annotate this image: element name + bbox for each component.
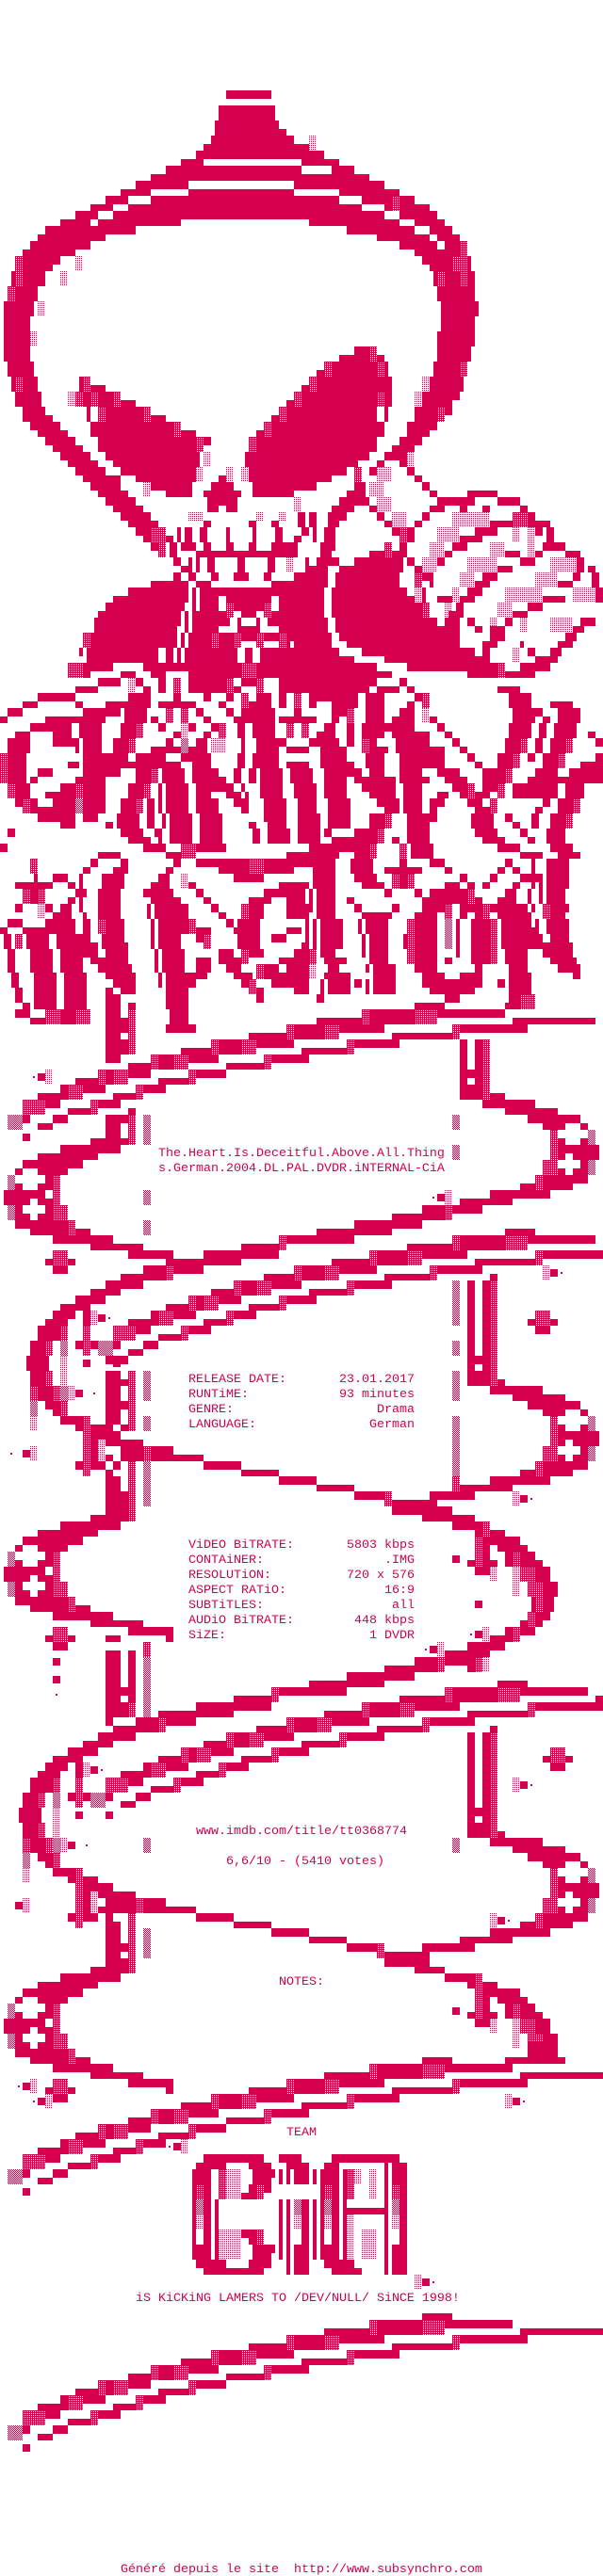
ribbon 0: diagonal twin band under logo <box>8 1006 595 1141</box>
team heading: TEAM <box>286 2126 317 2140</box>
release info: 23.01.2017 <box>339 1373 415 1387</box>
right swoop upper <box>467 1537 558 1597</box>
technical specs <box>188 1538 415 1643</box>
ribbon 2: diagonal twin band in imdb section <box>90 1683 603 1819</box>
release title: s.German.2004.DL.PAL.DVDR.iNTERNAL-CiA <box>158 1162 445 1176</box>
right ornament 3 <box>490 1857 599 1932</box>
ribbon 3: diagonal twin band above team logo <box>8 2060 603 2196</box>
release info: German <box>369 1418 415 1432</box>
release info: LANGUAGE: <box>188 1418 256 1432</box>
CiA team logo <box>192 2158 407 2271</box>
upper swoop 3 <box>467 1988 558 2049</box>
slogan: iS KiCKiNG LAMERS TO /DEV/NULL/ SiNCE 1998! <box>136 2292 460 2306</box>
technical specs: SUBTiTLES: <box>188 1599 264 1613</box>
notes heading: NOTES: <box>279 1975 324 1989</box>
scattered square and dot motifs <box>10 1070 562 2290</box>
left ornament 2 <box>4 1518 173 1638</box>
logo lettering: CHAINSAW INACTION <box>0 663 603 1058</box>
right swoop after release box <box>392 1480 550 1533</box>
technical specs: .IMG <box>384 1554 415 1568</box>
release info: 93 minutes <box>339 1388 415 1402</box>
technical specs: CONTAiNER: <box>188 1554 264 1568</box>
ribbon 4: bottom diagonal twin band <box>8 2316 603 2452</box>
release title <box>158 1147 445 1176</box>
left ornament 1 <box>4 1141 173 1262</box>
technical specs: 720 x 576 <box>347 1569 415 1583</box>
technical specs: all <box>392 1599 415 1613</box>
technical specs: 16:9 <box>384 1584 415 1598</box>
right tower 3 <box>467 1729 565 1849</box>
right tower 1 with first swoop <box>460 1039 558 1201</box>
stair line and left curve 1 <box>26 1205 482 1506</box>
left towers between boxes <box>90 1111 460 1977</box>
release info: RELEASE DATE: <box>188 1373 286 1387</box>
left ornament 3 <box>4 1970 173 2090</box>
release info: RUNTiME: <box>188 1388 249 1402</box>
connecting strokes around notes section <box>384 1940 565 2060</box>
technical specs: 1 DVDR <box>369 1629 415 1643</box>
cross ornaments <box>45 1250 573 2098</box>
technical specs: ViDEO BiTRATE: <box>188 1538 294 1553</box>
stair line and left curve 2 <box>19 1657 475 1958</box>
right ornament 2 <box>490 1405 599 1480</box>
imdb link and rating <box>196 1825 407 1869</box>
technical specs: AUDiO BiTRATE: <box>188 1614 294 1628</box>
technical specs: 5803 kbps <box>347 1538 415 1553</box>
illustration: alien skull with brain <box>4 94 603 674</box>
release info <box>188 1373 415 1432</box>
imdb link and rating: www.imdb.com/title/tt0368774 <box>196 1825 407 1839</box>
technical specs: 448 kbps <box>354 1614 415 1628</box>
technical specs: RESOLUTiON: <box>188 1569 271 1583</box>
release info: Drama <box>377 1403 415 1417</box>
right ornament 1 <box>490 1119 599 1194</box>
technical specs: SiZE: <box>188 1629 226 1643</box>
right tower 2 <box>467 1277 565 1397</box>
ribbon 1: diagonal twin band above release section <box>98 1232 603 1367</box>
right swoop lower <box>445 1521 554 1672</box>
release info: GENRE: <box>188 1403 234 1417</box>
imdb link and rating: 6,6/10 - (5410 votes) <box>226 1855 384 1869</box>
release title: The.Heart.Is.Deceitful.Above.All.Thing <box>158 1147 445 1161</box>
technical specs: ASPECT RATiO: <box>188 1584 286 1598</box>
